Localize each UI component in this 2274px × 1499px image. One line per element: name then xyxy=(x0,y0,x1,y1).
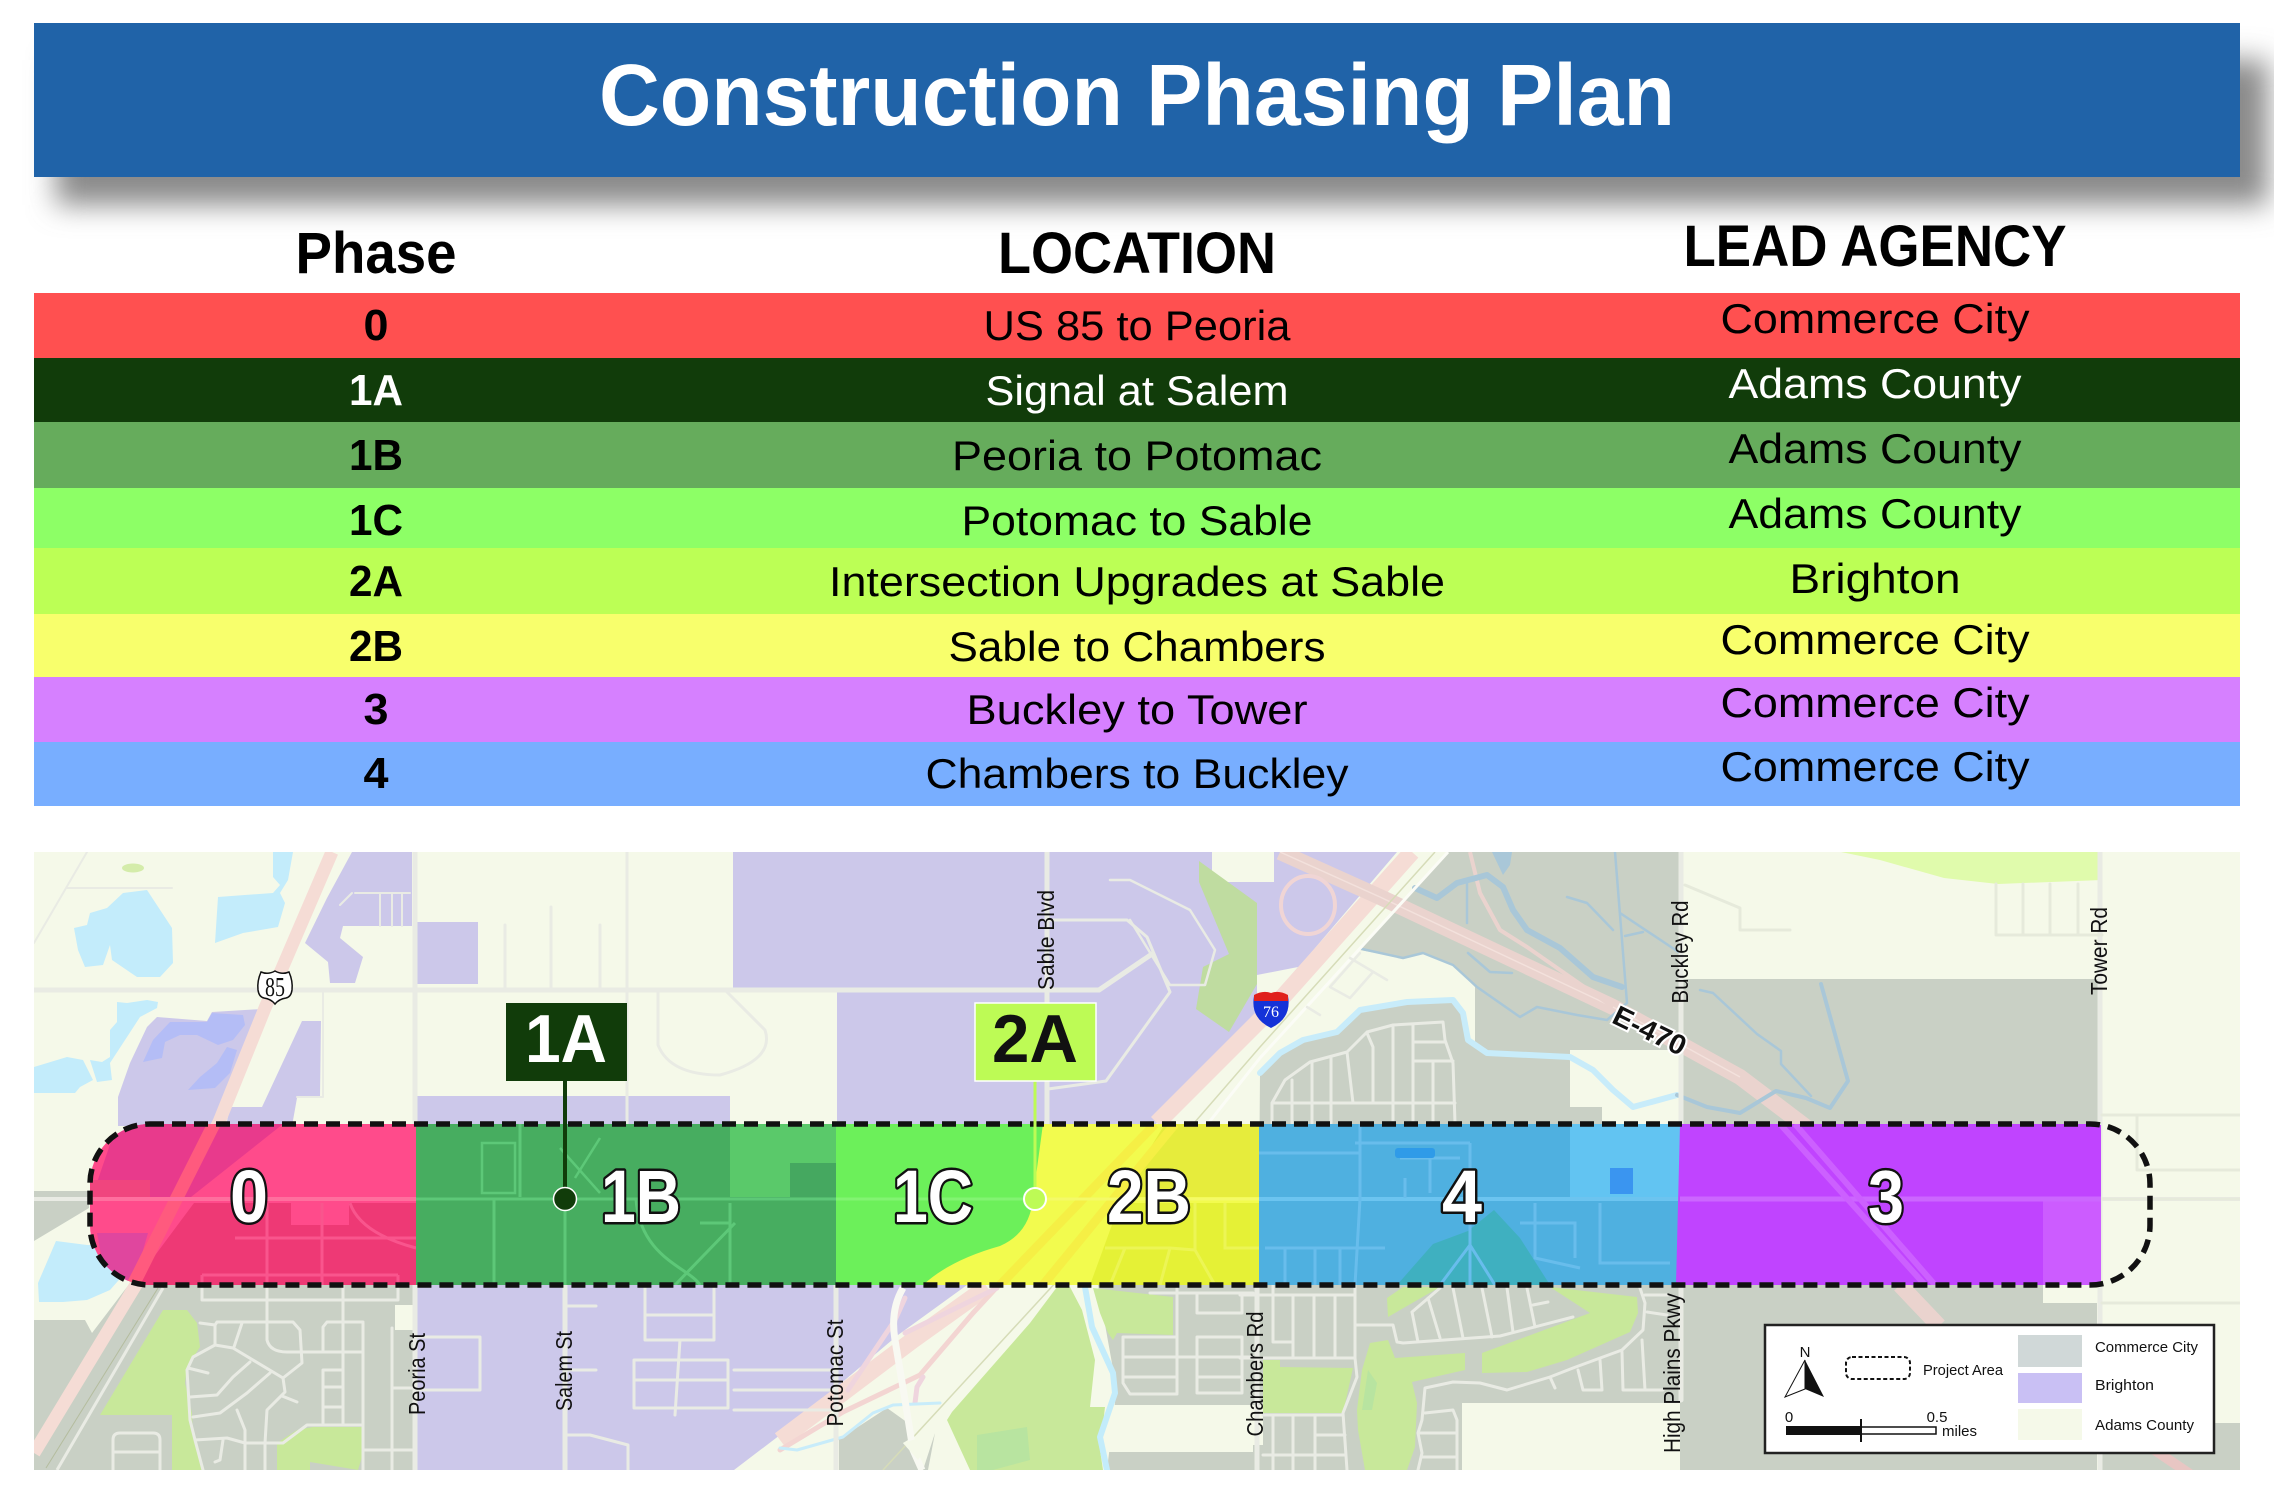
road label: Tower Rd: Tower Rd xyxy=(2086,907,2112,995)
road label: Chambers Rd: Chambers Rd xyxy=(1242,1312,1268,1436)
map areas: Commerce City xyxy=(34,852,2240,1470)
label: E-470: E-470 xyxy=(1608,1000,1692,1062)
phase 1B section xyxy=(416,1124,836,1285)
row 1B: 1B xyxy=(349,431,403,480)
legend item: Brighton xyxy=(2018,1373,2154,1403)
row 2A: Brighton xyxy=(1790,555,1960,602)
icon: north arrow xyxy=(1785,1344,1824,1397)
map rail lines xyxy=(46,852,1448,1470)
row 4 xyxy=(34,742,2240,806)
legend item: project area: Project Area xyxy=(1923,1362,2004,1379)
map roads xyxy=(34,852,2240,1470)
row 2B: Commerce City xyxy=(1720,616,2030,663)
row 2B: 2B xyxy=(349,622,403,671)
road label: Sable Blvd: Sable Blvd xyxy=(1033,890,1059,990)
phase label 4: 4 xyxy=(1442,1155,1482,1238)
road label: Peoria St: Peoria St xyxy=(404,1332,430,1415)
legend item: project area xyxy=(1846,1357,2004,1379)
map streams xyxy=(780,852,1848,1470)
row 1C: 1C xyxy=(349,496,403,545)
scale bar xyxy=(1785,1409,1977,1442)
row 1A: 1A xyxy=(349,366,403,415)
row 2A xyxy=(34,548,2240,614)
row 2A: 2A xyxy=(349,557,403,606)
scale bar: 0.5 xyxy=(1927,1409,1947,1426)
map panel xyxy=(34,852,2240,1474)
map areas: parks xyxy=(100,852,2102,1470)
project band xyxy=(90,1124,2150,1285)
title banner: Construction Phasing Plan xyxy=(599,47,1675,144)
map water: lakes xyxy=(34,852,293,1302)
scale bar: 0 xyxy=(1785,1409,1793,1426)
row 3: Commerce City xyxy=(1720,679,2030,726)
phase 4 section xyxy=(1259,1124,1680,1285)
row 1C: Potomac to Sable xyxy=(962,497,1312,544)
row 3 xyxy=(34,677,2240,742)
road label: High Plains Pkwy: High Plains Pkwy xyxy=(1659,1293,1685,1453)
legend item: Commerce City: Commerce City xyxy=(2095,1339,2198,1356)
legend item: Commerce City xyxy=(2018,1335,2198,1367)
phase fills xyxy=(90,1124,2101,1285)
title banner xyxy=(34,23,2240,177)
row 2B: Sable to Chambers xyxy=(948,623,1326,670)
row 0: Commerce City xyxy=(1720,295,2030,342)
row 0: US 85 to Peoria xyxy=(984,302,1291,349)
row 4: 4 xyxy=(364,749,389,798)
row 2B xyxy=(34,614,2240,677)
callout: phase 2A xyxy=(975,1001,1096,1210)
row 2A: Intersection Upgrades at Sable xyxy=(829,558,1445,605)
phase label 2B: 2B xyxy=(1107,1155,1191,1238)
row 1A: Signal at Salem xyxy=(986,367,1288,414)
row 3: 3 xyxy=(364,685,388,734)
legend item: Adams County: Adams County xyxy=(2095,1417,2194,1434)
row 1B: Adams County xyxy=(1728,425,2022,472)
column heading: lead agency: LEAD AGENCY xyxy=(1684,214,2066,279)
map areas: cream parcels xyxy=(395,852,1680,1470)
scale bar: miles xyxy=(1942,1423,1977,1440)
phase label 0: 0 xyxy=(230,1155,268,1238)
row 1C: Adams County xyxy=(1728,490,2022,537)
icon: US 85 shield: 85 xyxy=(265,972,285,1002)
phase 1C section xyxy=(836,1124,1056,1285)
road label: Salem St: Salem St xyxy=(551,1330,577,1411)
map highways xyxy=(34,852,2190,1474)
row 4: Commerce City xyxy=(1720,743,2030,790)
table: construction phases xyxy=(34,214,2240,806)
row 1A: Adams County xyxy=(1728,360,2022,407)
map base: Adams County xyxy=(34,852,2240,1470)
row 1B: Peoria to Potomac xyxy=(952,432,1322,479)
callout: phase 1A: 1A xyxy=(525,1001,607,1077)
row 1A xyxy=(34,358,2240,422)
phase label 3: 3 xyxy=(1868,1155,1904,1238)
row 3: Buckley to Tower xyxy=(966,686,1308,733)
road label: Potomac St: Potomac St xyxy=(822,1319,848,1426)
callout: phase 2A: 2A xyxy=(992,1001,1078,1077)
row 4: Chambers to Buckley xyxy=(926,750,1348,797)
icon: I-76 shield: 76 xyxy=(1263,1004,1279,1021)
legend item: Brighton: Brighton xyxy=(2095,1377,2154,1394)
column heading: location: LOCATION xyxy=(998,221,1276,286)
project area dashed outline xyxy=(90,1124,2150,1285)
phase label 1B: 1B xyxy=(601,1155,681,1238)
phase 2B section xyxy=(923,1124,1259,1285)
row 0: 0 xyxy=(364,301,388,350)
phase label 1C: 1C xyxy=(893,1155,973,1238)
map legend xyxy=(1765,1325,2214,1453)
banner shadow xyxy=(56,60,2268,205)
icon: north arrow: N xyxy=(1800,1344,1810,1361)
road label: Buckley Rd: Buckley Rd xyxy=(1667,900,1693,1004)
row 1B xyxy=(34,422,2240,488)
callout: phase 1A xyxy=(506,1001,627,1210)
column heading: phase: Phase xyxy=(296,221,456,286)
phase 0 section xyxy=(90,1124,416,1285)
phase 3 section xyxy=(1676,1124,2101,1285)
map areas: Brighton xyxy=(118,852,1397,1470)
legend item: Adams County xyxy=(2018,1409,2194,1440)
row 0 xyxy=(34,293,2240,358)
row 1C xyxy=(34,488,2240,548)
icon: I-76 shield xyxy=(1253,992,1289,1028)
